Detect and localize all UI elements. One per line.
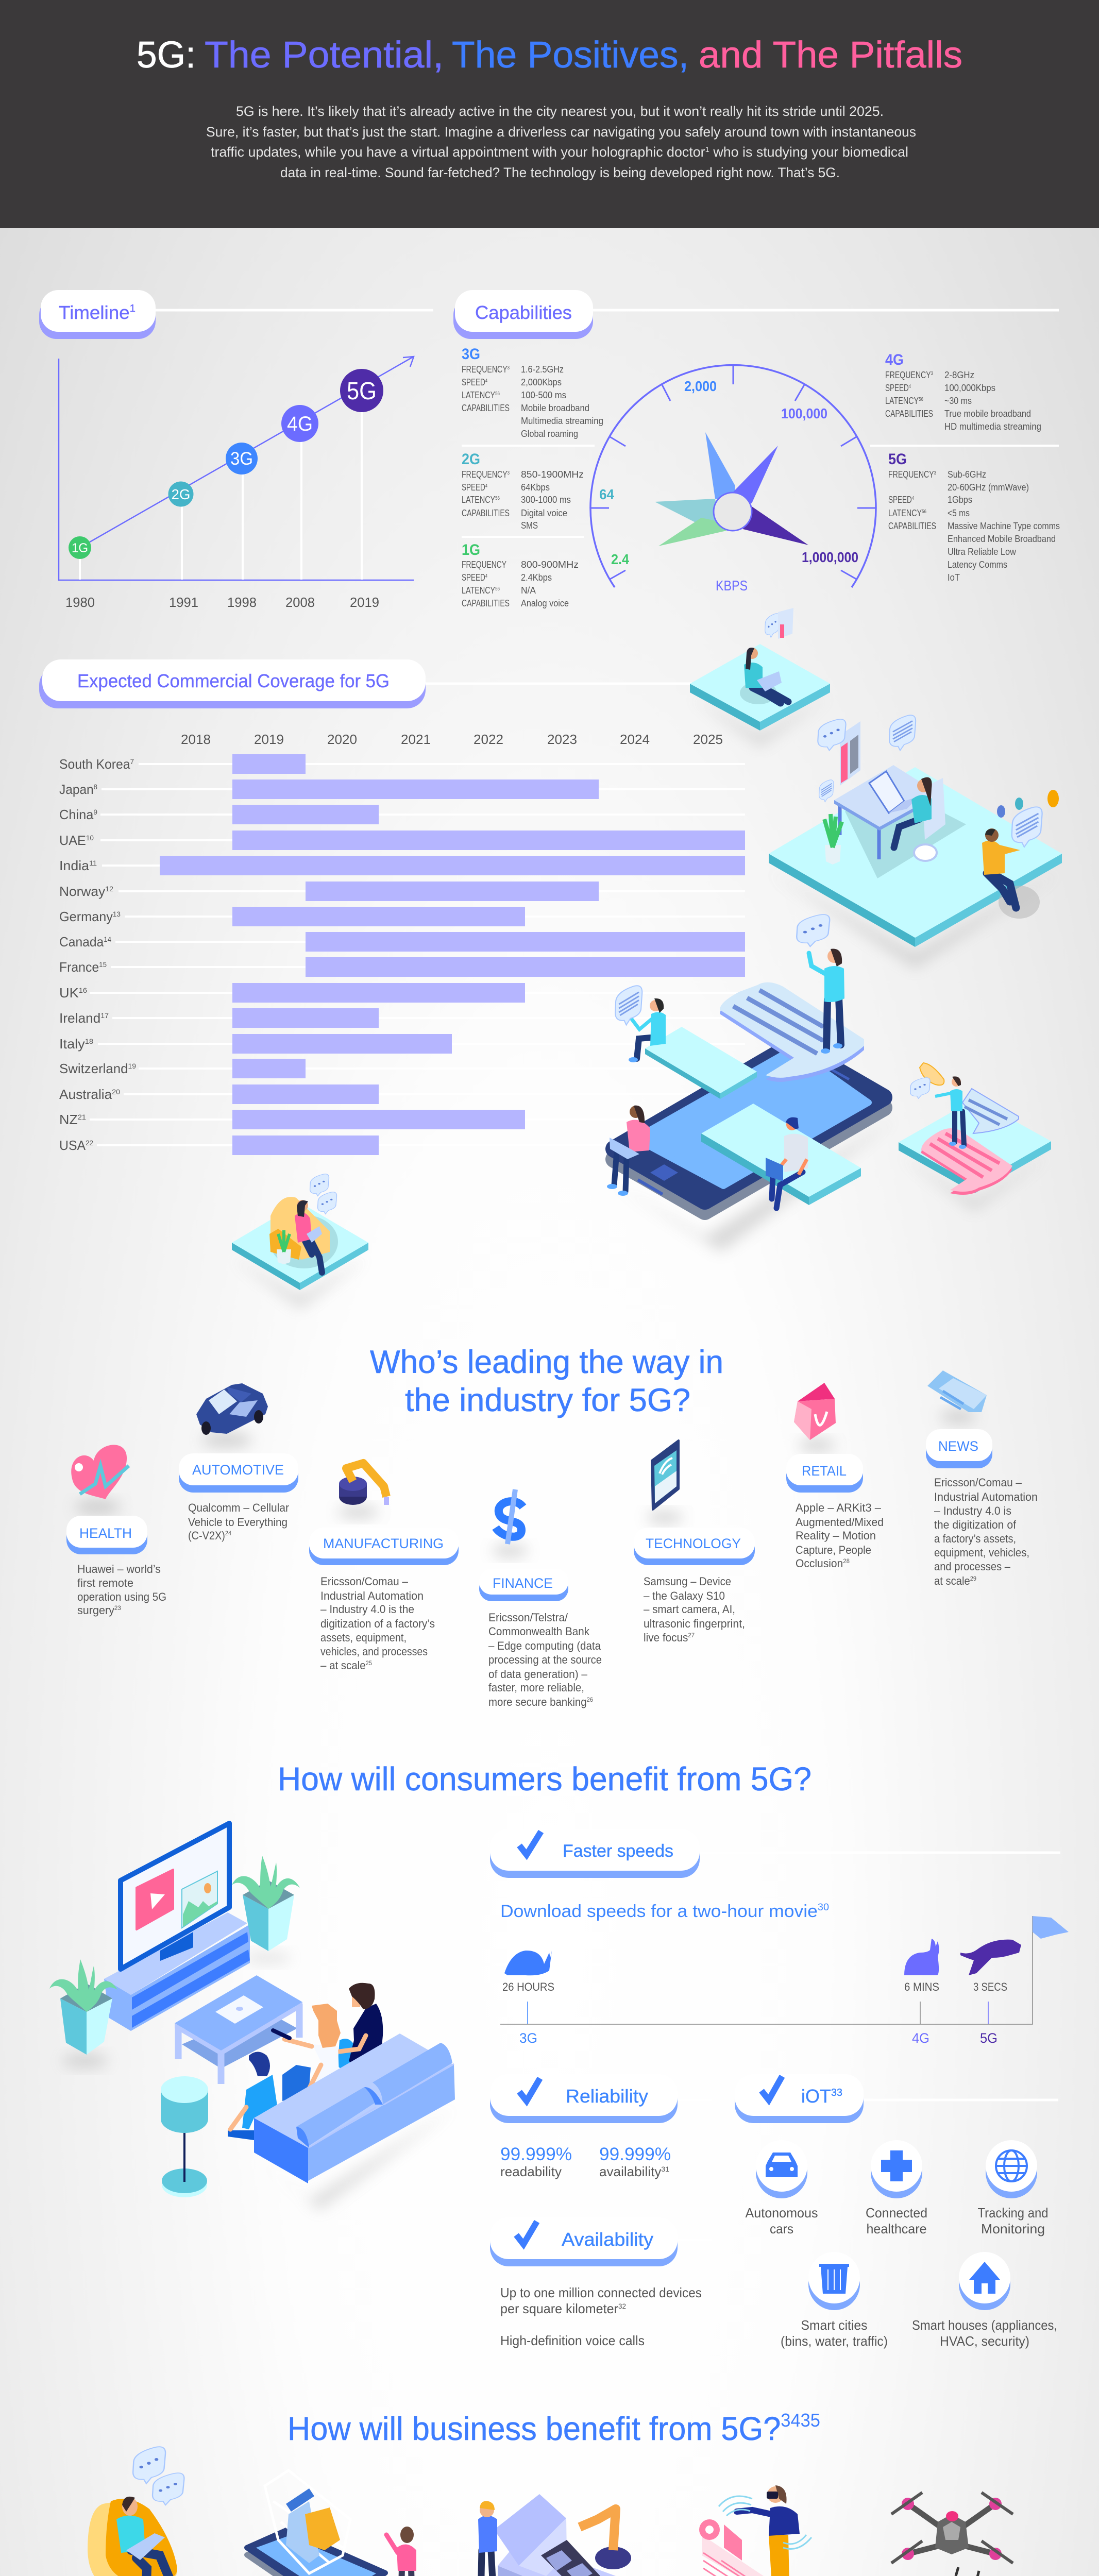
spec: 1G: 4 xyxy=(485,573,487,579)
illustration: office on big platform xyxy=(769,715,1062,969)
coverage bar chart xyxy=(59,754,745,1155)
iot: healthcare xyxy=(867,2221,926,2236)
sector: retail: RETAIL xyxy=(802,1463,847,1479)
panel: timeline xyxy=(39,290,433,610)
sector: retail: Augmented/Mixed xyxy=(796,1516,884,1529)
coverage bar chart: Italy xyxy=(59,1036,84,1052)
availability: High-definition voice calls xyxy=(500,2333,645,2348)
timeline chart xyxy=(59,357,414,610)
spec: 3G: CAPABILITIES xyxy=(462,403,510,413)
spec: 1G: 1G xyxy=(462,541,480,558)
intro text: traffic updates, while you have a virtual appointment with your holographic doctor xyxy=(211,144,708,160)
heading: business: 3435 xyxy=(781,2410,820,2431)
timeline chart: 5G xyxy=(347,378,377,405)
sector: technology: ultrasonic fingerprint, xyxy=(644,1617,745,1630)
sector: manufacturing: Ericsson/Comau – xyxy=(320,1575,409,1588)
icon: snail xyxy=(504,1951,552,1975)
spec: 3G: Multimedia streaming xyxy=(521,416,603,426)
coverage bar chart: 19 xyxy=(128,1062,136,1070)
spec: 2G: 3 xyxy=(508,470,510,476)
big chat bubble with man xyxy=(720,949,864,1082)
spec: 4G: 3 xyxy=(931,371,933,377)
sector: retail: Reality – Motion xyxy=(796,1529,876,1542)
coverage year axis: 2025 xyxy=(693,732,723,747)
spec: 3G: Global roaming xyxy=(521,429,578,439)
coverage year axis: 2018 xyxy=(181,732,211,747)
spec: 5G: 1Gbps xyxy=(948,495,972,505)
sector: manufacturing: vehicles, and processes xyxy=(320,1645,428,1658)
sector: manufacturing: MANUFACTURING xyxy=(323,1536,444,1551)
spec: 3G: 3G xyxy=(462,346,480,363)
download speed chart: 3 SECS xyxy=(973,1980,1007,1993)
spec: 2G: SMS xyxy=(521,520,538,531)
spec: 5G: Enhanced Mobile Broadband xyxy=(948,534,1056,544)
sector: news xyxy=(926,1370,1038,1587)
sector: finance: of data generation) – xyxy=(488,1668,588,1681)
heading: timeline: 1 xyxy=(130,303,136,314)
tv stand xyxy=(104,1912,250,2031)
spec: 2G: LATENCY xyxy=(462,495,504,505)
spec: 4G: ~30 ms xyxy=(944,396,972,406)
spec: 2G: Digital voice xyxy=(521,508,567,518)
spec: 1G: LATENCY xyxy=(462,585,504,596)
sector: technology: – smart camera, AI, xyxy=(644,1603,735,1616)
spec: 4G: True mobile broadband xyxy=(944,409,1031,419)
heading: consumers: How will consumers benefit from 5G? xyxy=(278,1760,811,1798)
coverage year axis: 2020 xyxy=(327,732,357,747)
spec: 3G: 1.6-2.5GHz xyxy=(521,364,564,375)
coverage bar chart: Germany xyxy=(59,909,114,924)
coverage bar chart: 12 xyxy=(105,885,113,893)
coverage bar chart: UAE xyxy=(59,833,87,848)
spec: 3G: Mobile broadband xyxy=(521,403,589,413)
platform a with seated man xyxy=(615,986,757,1099)
icon: smart houses xyxy=(959,2252,1010,2310)
sector: automotive: Vehicle to Everything xyxy=(188,1516,288,1529)
timeline chart: 1991 xyxy=(169,595,198,610)
download speed chart: 26 HOURS xyxy=(502,1980,554,1993)
timeline chart: 1998 xyxy=(227,595,257,610)
sector: retail xyxy=(786,1383,884,1570)
sector: manufacturing: Industrial Automation xyxy=(320,1589,424,1602)
reliability xyxy=(490,2074,712,2179)
heading: who's leading: the industry for 5G? xyxy=(405,1382,690,1418)
reliability: Reliability xyxy=(566,2086,648,2107)
sector: health: operation using 5G xyxy=(77,1590,166,1603)
coverage year axis: 2024 xyxy=(620,732,650,747)
timeline chart: 2008 xyxy=(285,595,315,610)
sector: automotive: AUTOMOTIVE xyxy=(192,1462,284,1478)
illustration: right platform with pink bubble xyxy=(899,1063,1051,1211)
sector: retail: Apple – ARKit3 – xyxy=(796,1501,882,1514)
sector: manufacturing: 25 xyxy=(366,1659,372,1667)
spec: 4G: 4G xyxy=(885,351,904,368)
illustration: woman with laptop on platform xyxy=(690,608,830,747)
spec: 1G: SPEED xyxy=(462,572,493,583)
coverage bar chart: 17 xyxy=(100,1011,109,1020)
tv xyxy=(121,1823,229,1969)
title: The Positives, xyxy=(452,35,689,76)
sector: automotive: (C-V2X) xyxy=(188,1529,229,1542)
title: and The Pitfalls xyxy=(699,35,962,76)
sector: finance: FINANCE xyxy=(493,1575,553,1591)
sector: automotive: 24 xyxy=(225,1530,231,1537)
heading: timeline xyxy=(39,290,433,339)
item: employees work remotely xyxy=(88,2447,184,2576)
title: 5G: xyxy=(137,35,196,76)
spec: 2G xyxy=(462,451,584,537)
availability: Up to one million connected devices xyxy=(500,2285,702,2300)
coverage bar chart: Japan xyxy=(59,782,96,797)
coverage bar chart: USA xyxy=(59,1138,87,1153)
sector: news: and processes – xyxy=(934,1560,1011,1573)
spec: 5G: 56 xyxy=(922,509,926,515)
spec: 1G: Analog voice xyxy=(521,598,569,608)
spec: 3G: FREQUENCY xyxy=(462,364,520,375)
coverage year axis: 2019 xyxy=(254,732,284,747)
sector: manufacturing: assets, equipment, xyxy=(320,1631,407,1644)
sector: finance xyxy=(479,1489,602,1708)
coverage bar chart: 22 xyxy=(86,1139,93,1147)
speedometer gauge: 2,000 xyxy=(684,378,717,394)
availability: Availability xyxy=(562,2229,653,2250)
spec: 5G: IoT xyxy=(948,572,960,583)
spec: 1G: 800-900MHz xyxy=(521,560,579,570)
coverage bar chart: 16 xyxy=(79,986,87,994)
coverage bar chart: UK xyxy=(59,985,78,1001)
item: drones xyxy=(891,2493,1013,2576)
icon: smart cities xyxy=(808,2252,860,2310)
icon: autonomous cars xyxy=(756,2140,807,2198)
spec: 3G: 2,000Kbps xyxy=(521,377,562,387)
spec: 4G: LATENCY xyxy=(885,396,927,406)
heading: coverage xyxy=(39,659,693,708)
lamp xyxy=(161,2076,208,2197)
sector: finance: – Edge computing (data xyxy=(488,1639,601,1652)
sector: health xyxy=(66,1445,166,1617)
spec: 5G: LATENCY xyxy=(888,508,931,518)
panel: business benefits xyxy=(70,2410,1018,2576)
sector: technology: Samsung – Device xyxy=(644,1575,731,1588)
spec: 2G: 64Kbps xyxy=(521,482,550,493)
spec: 2G: FREQUENCY xyxy=(462,469,520,480)
sector: retail: Capture, People xyxy=(796,1544,871,1556)
reliability: availability xyxy=(599,2164,661,2179)
coverage bar chart: 13 xyxy=(113,910,121,918)
sector: health: HEALTH xyxy=(79,1526,132,1541)
spec: 2G: 300-1000 ms xyxy=(521,495,571,505)
spec: 5G: Massive Machine Type comms xyxy=(948,521,1060,531)
platform b with seated man xyxy=(701,1104,861,1208)
spec: 2G: 850-1900MHz xyxy=(521,469,584,480)
spec: 5G xyxy=(888,451,1060,583)
coverage bar chart: Canada xyxy=(59,934,106,950)
speedometer gauge: 64 xyxy=(599,486,614,502)
intro text: 5G is here. It’s likely that it’s already active in the city nearest you, but it won’t really hit its stride until 2025. xyxy=(236,104,884,119)
download speed chart: Download speeds for a two-hour movie xyxy=(500,1902,804,1921)
item: controlling industrial processes xyxy=(478,2494,631,2576)
spec: 1G: CAPABILITIES xyxy=(462,598,510,608)
timeline chart: 2019 xyxy=(350,595,379,610)
heading: capabilities xyxy=(453,290,1059,339)
illustration: family watching TV xyxy=(49,1823,456,2210)
coverage year axis: 2022 xyxy=(474,732,503,747)
sector: retail: Occlusion xyxy=(796,1557,846,1570)
sector: finance: Ericsson/Telstra/ xyxy=(488,1611,568,1624)
sector: finance: Commonwealth Bank xyxy=(488,1625,590,1638)
intro text: who is studying your biomedical xyxy=(709,144,908,160)
icon: rabbit xyxy=(904,1939,939,1975)
item: virtual reality xyxy=(699,2485,811,2576)
availability: per square kilometer xyxy=(500,2301,622,2316)
coffee table xyxy=(175,1975,302,2084)
spec: 4G: 4 xyxy=(909,384,911,389)
spec: 4G: HD multimedia streaming xyxy=(944,421,1041,432)
reliability: readability xyxy=(500,2164,562,2179)
sector: finance: more secure banking xyxy=(488,1696,594,1708)
sector: manufacturing xyxy=(309,1463,459,1672)
spec: 3G: 3 xyxy=(508,365,510,371)
coverage year axis: 2021 xyxy=(401,732,431,747)
coverage bar chart: China xyxy=(59,807,94,822)
people xyxy=(228,1983,383,2140)
phone xyxy=(614,1045,884,1211)
coverage year axis xyxy=(181,732,723,747)
sector: automotive xyxy=(179,1383,298,1542)
spec: 4G: 2-8GHz xyxy=(944,370,974,380)
coverage bar chart: Ireland xyxy=(59,1010,100,1026)
spec: 5G: Ultra Reliable Low xyxy=(948,547,1017,557)
sector: news: 29 xyxy=(970,1575,976,1582)
heading: capabilities: Capabilities xyxy=(475,302,572,323)
spec: 5G: 3 xyxy=(934,470,936,476)
spec: 5G: Latency Comms xyxy=(948,560,1007,570)
availability: 32 xyxy=(618,2302,626,2310)
intro text: data in real-time. Sound far-fetched? The technology is being developed right now. That’s 5G. xyxy=(280,165,840,180)
item: improved customer engagement xyxy=(247,2470,416,2576)
panel: capabilities xyxy=(453,290,1060,608)
timeline chart: 2G xyxy=(171,486,191,502)
availability xyxy=(490,2217,712,2348)
download speed chart: 6 MINS xyxy=(904,1980,939,1993)
illustration: woman in armchair xyxy=(232,1174,368,1309)
iot: Autonomous xyxy=(745,2205,818,2221)
spec: 3G: 100-500 ms xyxy=(521,390,566,400)
intro text xyxy=(206,104,916,180)
iot: HVAC, security) xyxy=(940,2333,1029,2349)
spec: 4G: SPEED xyxy=(885,383,917,393)
iot: iOT xyxy=(801,2086,831,2107)
panel: expected commercial coverage xyxy=(39,608,1062,1309)
sector: news: a factory’s assets, xyxy=(934,1532,1016,1545)
spec: 3G: SPEED xyxy=(462,377,493,387)
sofa xyxy=(254,2033,455,2183)
heading: timeline: Timeline xyxy=(59,302,128,323)
title: The Potential, xyxy=(205,35,444,76)
spec: 5G: <5 ms xyxy=(948,508,970,518)
illustration: people and chat bubbles on phone xyxy=(607,949,897,1252)
spec: 1G xyxy=(462,541,579,608)
speedometer gauge: KBPS xyxy=(716,578,748,594)
iot: Smart houses (appliances, xyxy=(912,2317,1057,2333)
iot xyxy=(735,2074,1058,2349)
timeline chart: 1G xyxy=(72,541,88,555)
spec: 2G: 56 xyxy=(495,496,500,501)
speedometer gauge: 2.4 xyxy=(611,551,629,567)
spec: 2G: 4 xyxy=(485,483,487,489)
sector: automotive: Qualcomm – Cellular xyxy=(188,1501,289,1514)
coverage bar chart: India xyxy=(59,858,88,873)
sector: health: 23 xyxy=(114,1604,121,1612)
coverage bar chart: 18 xyxy=(85,1037,93,1045)
spec: 4G: 56 xyxy=(919,397,923,402)
sector: manufacturing: – at scale xyxy=(320,1659,369,1672)
spec: 4G: CAPABILITIES xyxy=(885,409,933,419)
intro text: Sure, it’s faster, but that’s just the start. Imagine a driverless car navigating you safely around town with instantaneous xyxy=(206,124,916,140)
coverage bar chart: Norway xyxy=(59,884,105,899)
sector: manufacturing: – Industry 4.0 is the xyxy=(320,1603,414,1616)
heading: coverage: Expected Commercial Coverage for 5G xyxy=(77,670,390,691)
speedometer gauge xyxy=(590,365,876,594)
coverage bar chart: 20 xyxy=(112,1088,120,1096)
speedometer gauge: 1,000,000 xyxy=(802,549,858,565)
sector: technology: 27 xyxy=(688,1632,695,1639)
spec: 4G: 100,000Kbps xyxy=(944,383,995,393)
coverage bar chart: Switzerland xyxy=(59,1061,128,1076)
icon: connected healthcare xyxy=(871,2140,922,2198)
spec: 2G: SPEED xyxy=(462,482,493,493)
heading: who's leading: Who’s leading the way in xyxy=(370,1344,723,1380)
coverage year axis: 2023 xyxy=(547,732,577,747)
intro text: 1 xyxy=(705,145,709,154)
spec: 5G: Sub-6GHz xyxy=(948,469,986,480)
spec: 1G: 2.4Kbps xyxy=(521,572,552,583)
download speed chart xyxy=(500,1902,1069,2046)
sector: health: Huawei – world’s xyxy=(77,1563,161,1575)
coverage bar chart: NZ xyxy=(59,1112,77,1127)
spec: 5G: 4 xyxy=(912,496,914,501)
sector: finance: 26 xyxy=(587,1696,593,1703)
coverage bar chart: 15 xyxy=(99,960,107,969)
coverage bar chart: 21 xyxy=(78,1113,86,1121)
speedometer gauge: 100,000 xyxy=(781,405,827,421)
iot: Tracking and xyxy=(978,2205,1048,2221)
spec: 2G: 2G xyxy=(462,451,480,468)
iot: cars xyxy=(770,2221,793,2236)
sector: technology: – the Galaxy S10 xyxy=(644,1589,725,1602)
sector: news: NEWS xyxy=(938,1438,978,1454)
sector: finance: processing at the source xyxy=(488,1653,602,1666)
heading: business: How will business benefit from 5G? xyxy=(288,2410,803,2447)
reliability: 31 xyxy=(661,2165,669,2173)
icon: panther xyxy=(960,1940,1021,1975)
spec: 5G: CAPABILITIES xyxy=(888,521,936,531)
spec: 3G xyxy=(462,346,603,446)
reliability: 99.999% xyxy=(500,2144,572,2164)
iot: Connected xyxy=(866,2205,927,2221)
coverage bar chart: 9 xyxy=(93,808,97,816)
sector: news: Ericsson/Comau – xyxy=(934,1476,1022,1489)
download speed chart: 30 xyxy=(818,1902,829,1913)
sector: news: – Industry 4.0 is xyxy=(934,1504,1011,1517)
spec: 1G: N/A xyxy=(521,585,536,596)
title xyxy=(137,35,962,76)
sector: technology: TECHNOLOGY xyxy=(646,1536,741,1551)
timeline chart: 1980 xyxy=(65,595,95,610)
coverage bar chart: South Korea xyxy=(59,756,134,772)
download speed chart: 4G xyxy=(912,2030,929,2046)
spec: 4G xyxy=(870,351,1059,446)
plants xyxy=(49,1856,300,2055)
timeline chart: 3G xyxy=(230,449,253,469)
iot: Monitoring xyxy=(981,2221,1045,2236)
spec: 5G: 5G xyxy=(888,451,907,468)
coverage bar chart: 8 xyxy=(94,783,97,791)
sector: news: the digitization of xyxy=(934,1518,1017,1531)
spec: 5G: FREQUENCY xyxy=(888,469,946,480)
header banner xyxy=(0,0,1099,228)
spec: 2G: CAPABILITIES xyxy=(462,508,510,518)
sector: news: Industrial Automation xyxy=(934,1490,1038,1503)
icon: tracking and monitoring xyxy=(986,2140,1037,2198)
coverage bar chart: 7 xyxy=(130,757,134,766)
download speed chart: 3G xyxy=(519,2030,537,2046)
sector: technology: live focus xyxy=(644,1631,691,1644)
sector: health: first remote xyxy=(77,1577,133,1589)
spec: 5G: SPEED xyxy=(888,495,920,505)
sector: news: at scale xyxy=(934,1574,973,1587)
panel: who's leading xyxy=(66,1344,1038,1708)
heading: who's leading xyxy=(370,1344,723,1418)
coverage bar chart: Australia xyxy=(59,1087,111,1102)
sector: retail: 28 xyxy=(843,1557,850,1565)
iot: (bins, water, traffic) xyxy=(781,2333,888,2349)
iot: 33 xyxy=(831,2087,842,2098)
iot: Smart cities xyxy=(801,2317,868,2333)
faster speeds heading xyxy=(490,1829,1060,1878)
woman with laptop xyxy=(607,1106,650,1196)
panel: consumer benefits xyxy=(49,1760,1069,2349)
sector: health: surgery xyxy=(77,1604,115,1617)
download speed chart: 5G xyxy=(980,2030,997,2046)
reliability: 99.999% xyxy=(599,2144,671,2164)
spec: 4G: FREQUENCY xyxy=(885,370,943,380)
sector: finance: faster, more reliable, xyxy=(488,1681,584,1694)
sector: manufacturing: digitization of a factory’s xyxy=(320,1617,435,1630)
coverage bar chart: 10 xyxy=(86,834,94,842)
spec: 3G: LATENCY xyxy=(462,390,504,400)
spec: 3G: 56 xyxy=(495,391,500,397)
coverage bar chart: 14 xyxy=(104,935,111,943)
sector: technology xyxy=(634,1440,755,1644)
faster speeds heading: Faster speeds xyxy=(563,1841,673,1861)
sector: news: equipment, vehicles, xyxy=(934,1546,1029,1559)
spec: 1G: 56 xyxy=(495,586,500,592)
spec: 1G: FREQUENCY xyxy=(462,560,506,570)
timeline chart: 4G xyxy=(287,413,313,435)
coverage bar chart: France xyxy=(59,959,101,975)
coverage bar chart: 11 xyxy=(89,859,97,867)
spec: 3G: 4 xyxy=(485,378,487,384)
spec: 5G: 20-60GHz (mmWave) xyxy=(948,482,1029,493)
